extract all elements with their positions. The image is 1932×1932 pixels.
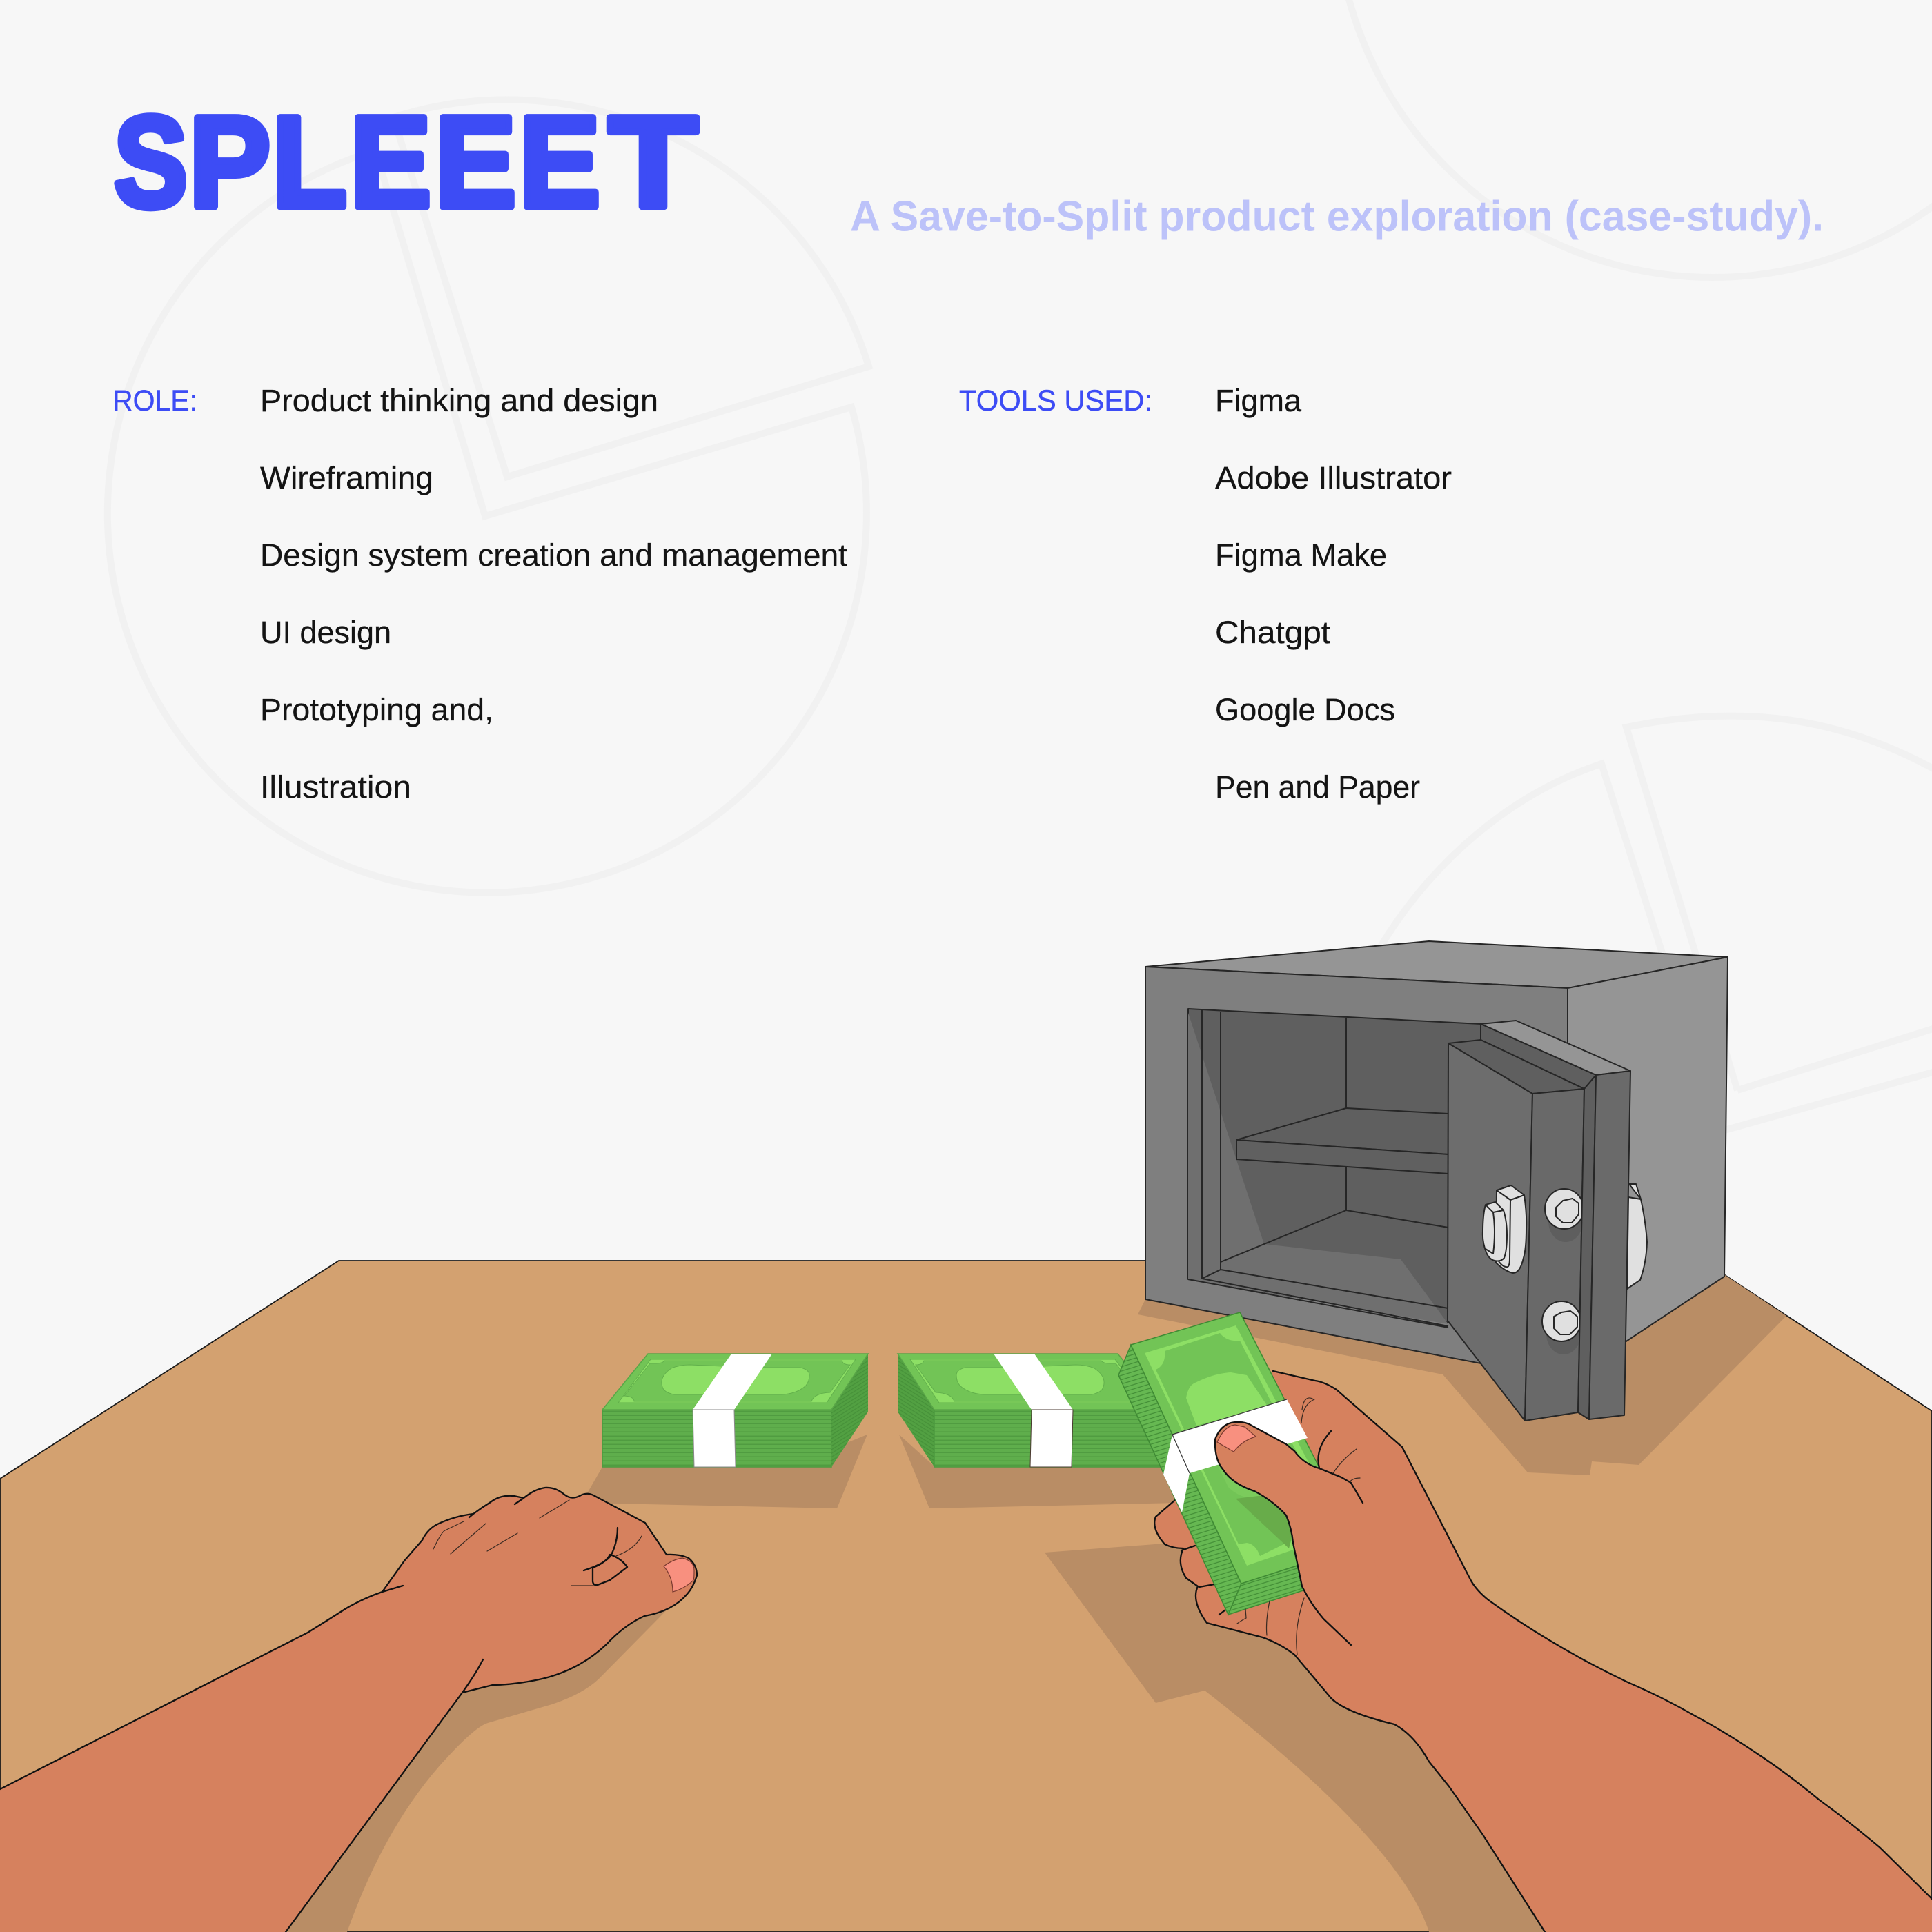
strap (1172, 1399, 1308, 1473)
right thumb and palm (1215, 1398, 1380, 1655)
money stack middle (898, 1354, 1163, 1467)
title: L (272, 90, 347, 235)
left thumb nail (664, 1558, 694, 1592)
title: P (189, 90, 270, 235)
finger gap (593, 1555, 627, 1585)
title: E (435, 90, 516, 235)
strap (693, 1354, 772, 1410)
tools label: TOOLS USED: (959, 384, 1152, 417)
role list: Product thinking and design (260, 383, 658, 418)
money stack left (602, 1354, 868, 1467)
right hand outline (1154, 1371, 1932, 1932)
tools list: Figma (1215, 383, 1302, 418)
role list: Design system creation and management (260, 538, 848, 573)
safe front face (1145, 967, 1568, 1380)
safe top face (1145, 941, 1728, 988)
title: T (609, 90, 698, 235)
subtitle: A Save-to-Split product exploration (case-study). (850, 193, 1824, 240)
role list: Illustration (260, 769, 411, 805)
thumb nail (1217, 1425, 1256, 1452)
door bolts (1542, 1189, 1584, 1354)
table (0, 1261, 1932, 1932)
role list: Prototyping and, (260, 692, 493, 727)
right arm and hand (1154, 1371, 1932, 1932)
title: S (114, 90, 188, 235)
hinge (1627, 1184, 1647, 1289)
safe interior (1188, 1009, 1483, 1328)
tools list: Pen and Paper (1215, 769, 1420, 805)
title: E (519, 90, 600, 235)
title: E (350, 90, 431, 235)
role label: ROLE: (112, 384, 197, 417)
safe right face (1568, 957, 1728, 1380)
safe (1145, 941, 1728, 1421)
safe door (1448, 1021, 1630, 1421)
role list: UI design (260, 615, 391, 650)
tools list: Chatgpt (1215, 615, 1331, 650)
held money stack (1118, 1312, 1359, 1615)
role list: Wireframing (260, 460, 433, 495)
table shadows (286, 1275, 1786, 1932)
tools list: Figma Make (1215, 538, 1387, 573)
left arm and hand (0, 1488, 697, 1932)
role list (112, 383, 848, 805)
strap (994, 1354, 1073, 1410)
tools list: Adobe Illustrator (1215, 460, 1452, 495)
tools list: Google Docs (1215, 692, 1395, 727)
tools list (959, 383, 1452, 805)
door handle (1483, 1185, 1526, 1273)
